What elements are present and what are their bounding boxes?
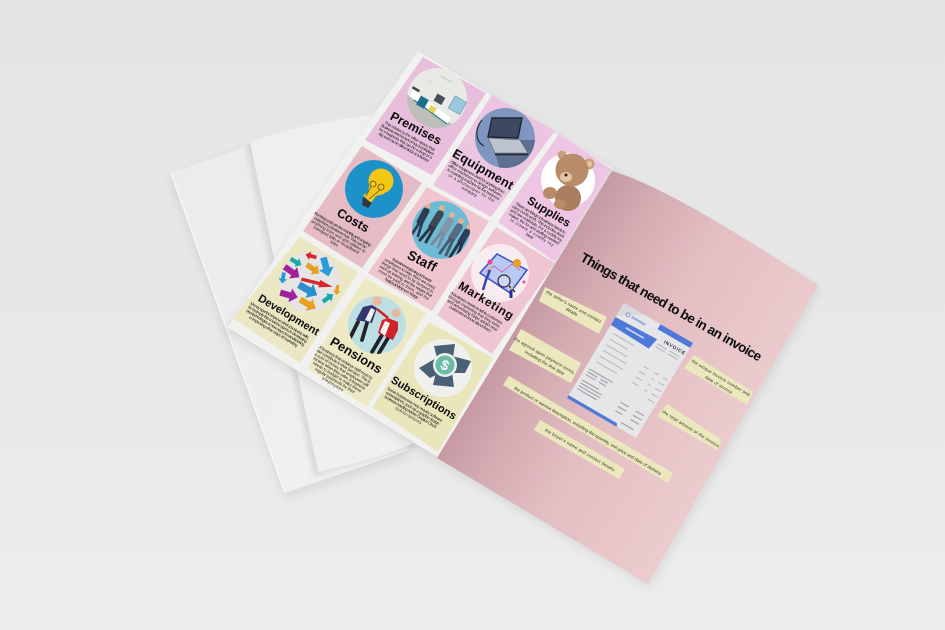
text: supplies body: to create a cuddly toy xyxy=(509,217,556,248)
text: staff body: such as training, and the wages that xyxy=(379,264,434,299)
text: marketing body: customers to know about them xyxy=(448,304,492,333)
text: supplies body: and raw materials. For a cuddly toy xyxy=(509,207,564,243)
text: pensions body: A business that employs staff must by xyxy=(318,344,375,381)
text: development body: or improving other ways of marketing xyxy=(248,315,299,348)
closed brochure, back left xyxy=(170,146,410,498)
callout: seller: details xyxy=(565,306,579,317)
closed brochure, back right xyxy=(246,115,420,476)
text: premises body: This relates to the office space that xyxy=(384,120,437,152)
right brochure page xyxy=(437,171,818,584)
text: pensions body: receive when they retire. A business xyxy=(312,356,366,391)
text: costs body: anything from rent and utilities to xyxy=(310,219,367,254)
text: pensions body: employees xyxy=(321,376,345,392)
heading: Equipment: Equipment xyxy=(450,146,517,193)
text: equipment body: to a printing machine for the business xyxy=(446,167,501,201)
icon: laptop equipment xyxy=(475,108,535,168)
text: equipment body: office machinery to design software, xyxy=(448,163,504,198)
text: supplies body: carry out its work. This includes stock xyxy=(512,204,566,240)
text: pensions body: needs to budget to make these xyxy=(312,360,363,394)
callout: seller: the seller's name and contact xyxy=(545,289,603,324)
callout: payment terms: the agreed-upon payment terms, xyxy=(513,336,576,375)
callout: invoice number: the unique invoice number and xyxy=(691,358,751,397)
icon: elderly couple pensions xyxy=(348,296,406,354)
text: development body xyxy=(243,301,311,351)
text: staff body xyxy=(375,253,440,306)
text: pensions body: law contribute to their pension. This is xyxy=(316,348,372,384)
text: equipment body xyxy=(441,159,506,209)
text: premises body xyxy=(376,119,438,164)
icon: marketing chart xyxy=(471,244,529,302)
text: supplies body xyxy=(503,200,568,254)
heading: Pensions: Pensions xyxy=(328,334,385,377)
text: costs body xyxy=(305,210,373,262)
text: INVOICE: INVOICE xyxy=(662,339,687,357)
icon: office premises xyxy=(407,68,467,128)
text: marketing body: through marketing that they exist, xyxy=(448,294,502,329)
panel: equipment xyxy=(433,95,555,217)
text: supplies body: maker, the fur and stuffing needed xyxy=(508,212,561,246)
callout: buyer xyxy=(534,420,625,479)
heading: Subscriptions: Subscriptions xyxy=(389,374,458,423)
callout: payment terms: including the due date xyxy=(524,349,566,376)
icon: light bulb costs xyxy=(345,160,403,218)
text: equipment body: or a photocopier for the xyxy=(448,173,496,203)
text: development body: new technologies or new ways of manufacturing, xyxy=(245,308,306,347)
heading: Things that need to be in an invoice: Things that need to be in an invoice xyxy=(578,250,765,365)
text: costs body: bills xyxy=(330,239,339,248)
panel: premises xyxy=(365,57,486,175)
text: supplies body: These are things a business needs to xyxy=(515,201,567,235)
text: staff body: things that need to be factored in, xyxy=(381,260,435,294)
heading: Marketing: Marketing xyxy=(456,279,516,323)
text: staff body: must be paid to them, and the xyxy=(377,268,431,302)
text: supplies body: bear xyxy=(525,232,535,240)
invoice image xyxy=(567,303,693,438)
text: subscriptions body: Some businesses may require software xyxy=(386,386,444,423)
text: marketing body: and advertising helps attract new xyxy=(446,298,499,333)
open brochure shadow xyxy=(225,56,820,587)
text: pensions body: regular payments for their xyxy=(314,366,357,395)
text: costs body: expenses a business has. This can be xyxy=(313,215,368,250)
callout: buyer: the buyer's name and contact details xyxy=(544,427,615,472)
heading: Supplies: Supplies xyxy=(525,195,572,230)
text: costs body: transport bills or broadband xyxy=(313,225,361,255)
callout: invoice number xyxy=(684,355,753,405)
text: staff body: National Minimum Wage xyxy=(384,277,420,300)
text: premises body: Business need to rent or buy a workplace xyxy=(380,123,436,157)
text: subscriptions body xyxy=(380,386,444,434)
icon glyph: dollar sign: $ xyxy=(438,356,452,374)
panel: development xyxy=(233,237,358,363)
text: premises body: city, such as an office block or a factory xyxy=(378,131,431,163)
text: marketing body xyxy=(443,290,504,336)
panel: marketing xyxy=(437,227,555,354)
text: premises body: for a business, this can be a shop or a xyxy=(378,127,434,160)
text: costs body: Running costs are the monthly and ongoing xyxy=(313,210,373,248)
text: development body: Money spent to improve what a business sells, xyxy=(250,301,310,340)
panel: costs xyxy=(303,146,422,268)
text: development body: for example this could be spent on developing xyxy=(247,304,309,344)
heading: Staff: Staff xyxy=(405,247,440,275)
panel: subscriptions xyxy=(372,322,493,452)
callout: invoice number: date of invoice xyxy=(704,375,734,395)
callout: payment terms xyxy=(509,329,581,383)
callout: seller xyxy=(539,287,607,334)
icon: colourful arrows development xyxy=(278,250,342,315)
text: equipment body: company xyxy=(461,185,479,198)
heading: Development: Development xyxy=(256,293,321,339)
panel: staff xyxy=(368,187,489,311)
text: pensions body xyxy=(305,344,375,403)
text: staff body: If a business is growing and needs xyxy=(392,257,433,283)
text: subscriptions body: subscriptions xyxy=(394,405,423,425)
text: staff body: employees to help, there are many xyxy=(384,257,437,291)
text: subscriptions body: subscriptions, such as a graphic design xyxy=(385,390,441,426)
panel: supplies xyxy=(498,134,611,262)
heading: Premises: Premises xyxy=(388,109,444,148)
callout: total amount: the total amount of the invoice xyxy=(661,409,721,449)
icon: teddy bear supplies xyxy=(541,150,595,211)
text: equipment body: Office equipment used for anything from xyxy=(450,159,506,195)
heading: Costs: Costs xyxy=(334,206,372,235)
icon: staff group xyxy=(412,201,472,259)
text: subscriptions body: business needing Adobe Creative Cloud xyxy=(384,394,438,430)
text: marketing body: A business needs to tell its customers xyxy=(450,290,504,325)
text: pensions body: a sum of money that employees will xyxy=(314,352,370,388)
panel: pensions xyxy=(305,278,426,407)
left brochure page xyxy=(227,51,612,458)
callout: product description: the product or service description, including the quantity, unit price and date of delivery xyxy=(513,385,663,476)
